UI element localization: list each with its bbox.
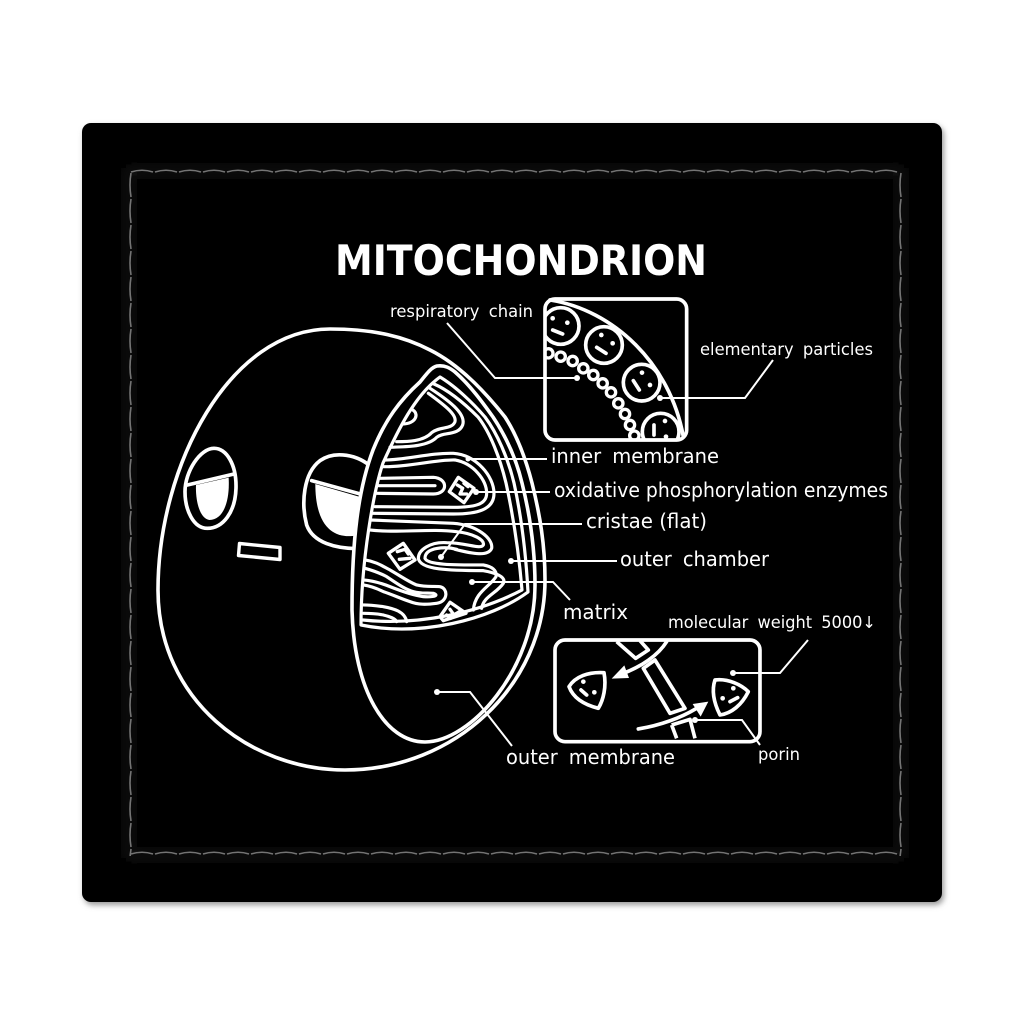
labels: porin [758,745,800,764]
title: MITOCHONDRION [335,236,707,285]
labels: molecular weight 5000↓ [668,613,876,632]
labels: outer membrane [506,745,675,769]
stitched border [126,166,906,860]
inner membrane lines [361,377,528,629]
inset: porin [555,640,760,742]
labels: cristae (flat) [586,509,707,533]
inset: respiratory chain [542,299,687,450]
cut section outline [352,366,535,742]
permeating molecules [569,673,605,708]
body outline [158,329,545,770]
labels: inner membrane [551,444,719,468]
labels: outer chamber [620,547,770,571]
mouth [238,544,280,560]
crista 3 [371,520,492,554]
labels: oxidative phosphorylation enzymes [554,478,888,502]
labels: respiratory chain [390,302,533,321]
right eye [304,455,372,549]
mitochondrion character [158,329,545,770]
left eye [185,448,236,528]
bead chain [544,349,639,440]
crista 4 [363,560,446,604]
elementary particles [542,308,579,344]
card background [82,123,944,905]
labels: matrix [563,600,628,624]
leader lines [434,323,808,746]
upper blob crista [390,388,463,447]
cristae [363,388,504,622]
crista 2 [373,453,494,514]
labels [390,302,888,769]
labels: elementary particles [700,340,873,359]
enzymes [388,477,474,621]
